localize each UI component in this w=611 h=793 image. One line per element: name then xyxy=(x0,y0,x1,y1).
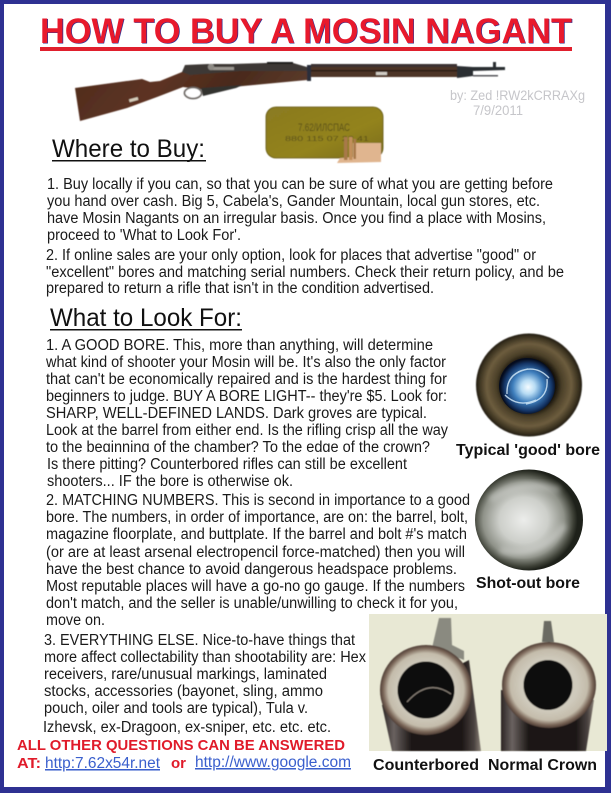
text block: matching numbers: (or are at least arsenal electropencil force-matched) then you will xyxy=(46,544,465,561)
text block: matching numbers: magazine floorplate, and buttplate. If the barrel and bolt #'s match xyxy=(46,526,467,543)
text block: matching numbers: Most reputable places will have a go-no go gauge. If the numbers xyxy=(46,578,465,595)
text block: matching numbers: move on. xyxy=(46,612,105,629)
footer callout: http:7.62x54r.net xyxy=(45,755,161,772)
text block: a good bore: to the beginning of the chamber? To the edge of the crown? xyxy=(46,439,430,456)
rifle stock xyxy=(75,67,307,121)
label: normal crown: Normal Crown xyxy=(488,757,597,774)
text block: a good bore: Look at the barrel from either end. Is the rifling crisp all the way xyxy=(46,422,448,439)
text block: a good bore: SHARP, WELL-DEFINED LANDS. Dark groves are typical. xyxy=(46,405,427,422)
text block: a good bore: beginners to judge. BUY A BORE LIGHT-- they're $5. Look for: xyxy=(46,388,447,405)
muzzle xyxy=(457,66,505,78)
text block: everything else xyxy=(43,632,366,736)
normal crown muzzle xyxy=(501,621,596,751)
text block: where to buy: have Mosin Nagants on an irregular basis. Once you find a place with Mosins, xyxy=(47,210,546,227)
icon: ammo tin with cartridges: 7.62/ИЛСПАС xyxy=(298,122,350,134)
text block: everything else: 3. EVERYTHING ELSE. Nice-to-have things that xyxy=(44,632,356,649)
icon: ammo tin with cartridges: 880 115 07 22 41 xyxy=(285,136,369,143)
title: HOW TO BUY A MOSIN NAGANT xyxy=(40,12,572,51)
text block: everything else: Izhevsk, ex-Dragoon, ex-sniper, etc. etc. etc. xyxy=(43,719,331,736)
heading: what to look for: What to Look For: xyxy=(50,304,242,332)
handguard xyxy=(311,64,457,77)
text block: a good bore: what kind of shooter your Mosin will be. It's also the only factor xyxy=(45,354,446,371)
text block: matching numbers: don't match, and the seller is unable/unwilling to check it for you, xyxy=(46,595,458,612)
byline: by: Zed !RW2kCRRAXg xyxy=(450,87,585,103)
title: HOW TO BUY A MOSIN NAGANT xyxy=(41,13,573,52)
text block: matching numbers: 2. MATCHING NUMBERS. This is second in importance to a good xyxy=(46,492,470,509)
heading: where to buy: Where to Buy: xyxy=(52,135,205,163)
text block: a good bore: shooters... IF the bore is otherwise ok. xyxy=(47,473,293,490)
icon: ammo tin with cartridges xyxy=(266,107,383,163)
counterbored muzzle xyxy=(380,618,481,751)
footer callout xyxy=(17,737,351,772)
text block: where to buy: 1. Buy locally if you can, so that you can be sure of what you are getting before xyxy=(47,176,553,193)
icon: rifle xyxy=(75,62,505,121)
text block: everything else: receivers, rare/unusual markings, laminated xyxy=(44,666,327,683)
text block: where to buy: 2. If online sales are your only option, look for places that advertise "good" or xyxy=(46,247,536,264)
barrel band xyxy=(307,65,311,81)
byline: 7/9/2011 xyxy=(473,102,523,118)
text block: a good bore: that can't be economically repaired and is the hardest thing for xyxy=(46,371,447,388)
text block: everything else: stocks, accessories (bayonet, sling, ammo xyxy=(44,683,323,700)
text block: everything else: pouch, oiler and tools are typical), Tula v. xyxy=(44,700,308,717)
trigger guard xyxy=(184,88,202,98)
footer callout: AT: xyxy=(17,755,41,772)
text block: a good bore: 1. A GOOD BORE. This, more than anything, will determine xyxy=(46,337,433,354)
text block: where to buy: "excellent" bores and matching serial numbers. Check their return policy, and be xyxy=(46,264,564,281)
label: counterbored: Counterbored xyxy=(373,757,479,774)
label: typical good bore: Typical 'good' bore xyxy=(456,442,600,459)
text block: matching numbers: have the best chance to avoid dangerous headspace problems. xyxy=(46,561,457,578)
text block: where to buy: prepared to return a rifle that isn't in the condition advertised. xyxy=(46,280,434,297)
label: shot-out bore: Shot-out bore xyxy=(476,575,580,592)
rifle receiver xyxy=(182,63,307,75)
photo: counterbored and normal crown xyxy=(369,614,607,751)
text block: matching numbers xyxy=(46,492,470,629)
text block: where to buy xyxy=(46,176,564,297)
text block: where to buy: you hand over cash. Big 5, Cabela's, Gander Mountain, local gun stores, etc. xyxy=(47,193,540,210)
footer callout: or xyxy=(171,755,186,772)
footer callout: ALL OTHER QUESTIONS CAN BE ANSWERED xyxy=(17,737,345,754)
text block: a good bore: Is there pitting? Counterbored rifles can still be excellent xyxy=(47,456,408,473)
text block: matching numbers: bore. The numbers, in order of importance, are on: the barrel, bolt, xyxy=(46,509,468,526)
text block: a good bore xyxy=(40,337,448,490)
icon: shot-out bore xyxy=(475,470,583,570)
byline xyxy=(450,87,585,118)
footer callout: http://www.google.com xyxy=(195,754,351,771)
icon: typical good bore xyxy=(476,334,582,436)
text block: where to buy: proceed to 'What to Look For'. xyxy=(47,227,241,244)
text block: everything else: more affect collectability than shootability are: Hex xyxy=(44,649,366,666)
